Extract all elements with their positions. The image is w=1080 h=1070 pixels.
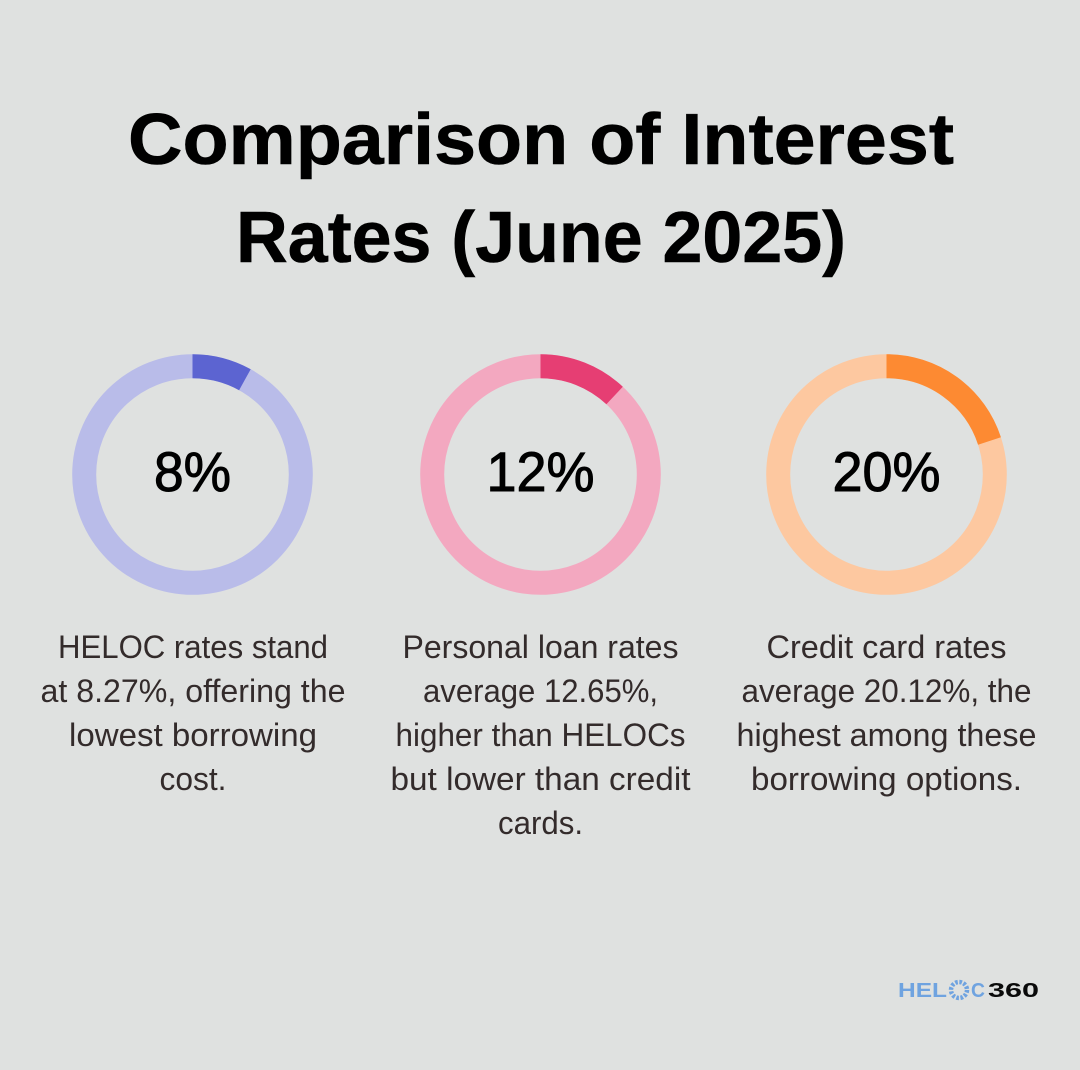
description: HELOC: cost.	[160, 761, 226, 797]
description: HELOC	[40, 629, 346, 797]
donut chart: 12%	[432, 366, 649, 583]
title: Comparison of Interest	[128, 100, 954, 180]
description: HELOC: lowest borrowing	[69, 717, 317, 753]
description: personal loan: cards.	[498, 805, 583, 841]
description: personal loan	[390, 629, 690, 841]
description: credit card: borrowing options.	[751, 761, 1022, 797]
logo: HELOC360: 360	[988, 980, 1039, 1002]
logo: HELOC360: C	[971, 980, 985, 1002]
value: 12%: 12%	[486, 440, 594, 503]
description: personal loan: higher than HELOCs	[396, 717, 686, 753]
value: 8%: 8%	[154, 440, 231, 503]
title: Rates (June 2025)	[236, 198, 846, 278]
logo: HELOC360	[898, 980, 1039, 1002]
description: personal loan: average 12.65%,	[423, 673, 658, 709]
value: 20%: 20%	[832, 440, 940, 503]
title	[128, 100, 954, 278]
description: credit card	[736, 629, 1036, 797]
panel: credit card rate	[736, 366, 1036, 797]
donut chart: 8%	[84, 366, 301, 583]
panel: personal loan rate	[390, 366, 690, 841]
description: credit card: Credit card rates	[766, 629, 1006, 665]
description: HELOC: HELOC rates stand	[58, 629, 328, 665]
description: personal loan: but lower than credit	[390, 761, 690, 797]
donut chart: 20%	[778, 366, 995, 583]
description: credit card: highest among these	[736, 717, 1036, 753]
description: personal loan: Personal loan rates	[402, 629, 678, 665]
description: credit card: average 20.12%, the	[742, 673, 1032, 709]
logo: HELOC360: HEL	[898, 980, 947, 1002]
description: HELOC: at 8.27%, offering the	[40, 673, 346, 709]
panel: HELOC rate	[40, 366, 346, 797]
icon: swirl letter O	[951, 982, 967, 998]
